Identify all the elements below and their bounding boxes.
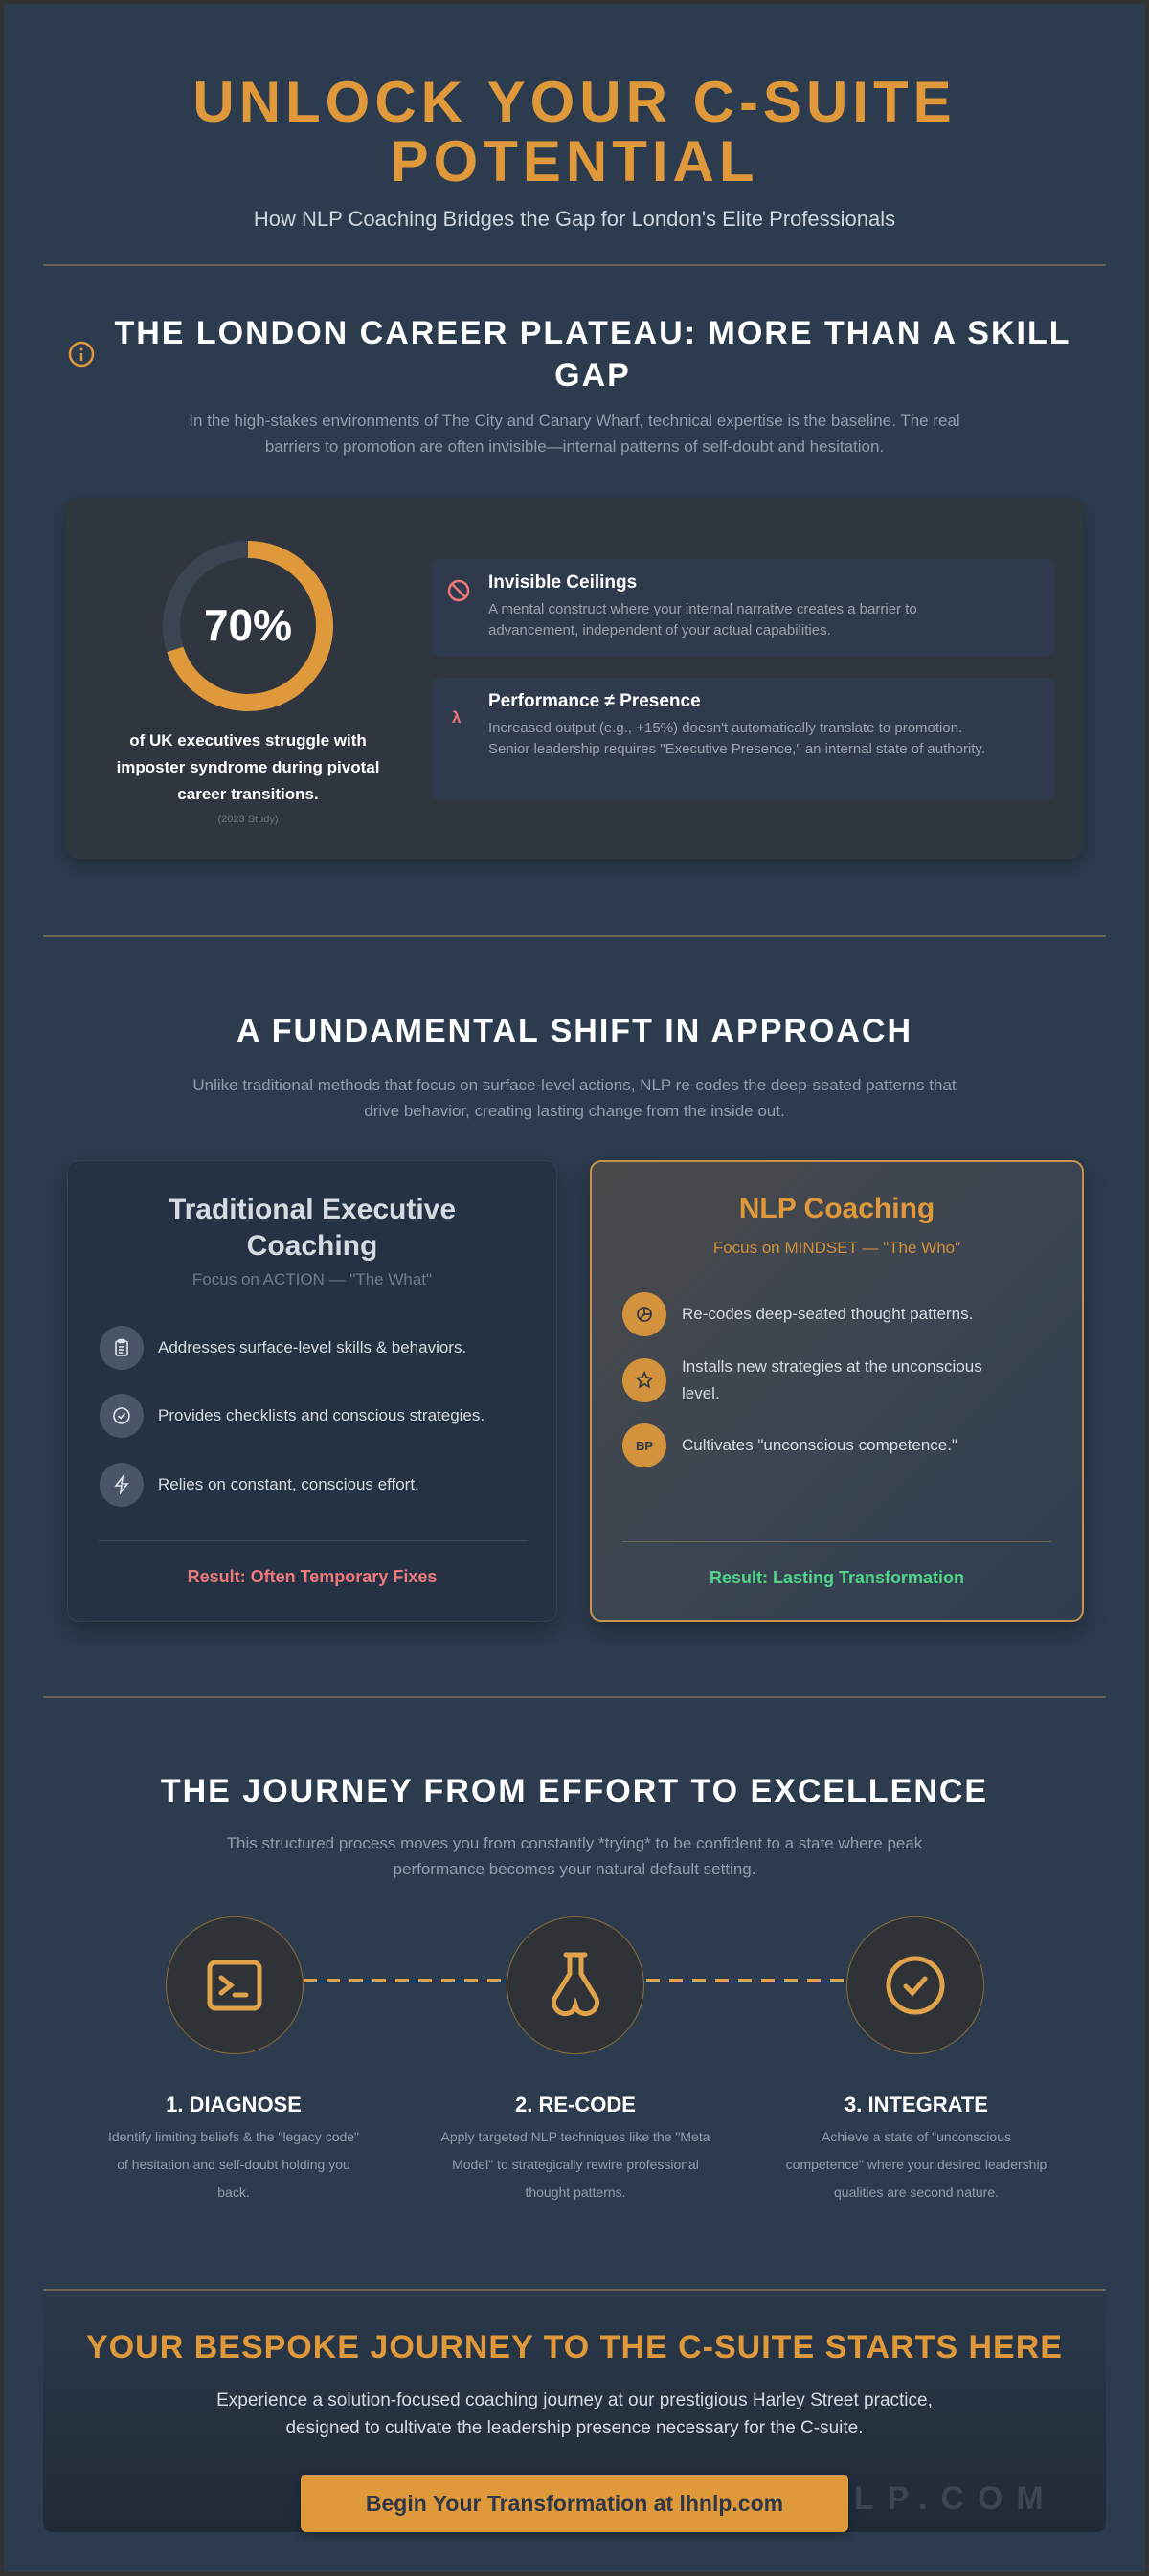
step 3 text: Achieve a state of "unconscious competence" where your desired leadership qualities are second nature. xyxy=(786,2129,1047,2200)
step 2 text: Apply targeted NLP techniques like the "Meta Model" to strategically rewire professional thought patterns. xyxy=(440,2129,710,2200)
panel: traditional coaching: Focus on ACTION — "The What" xyxy=(192,1270,432,1288)
item 3 xyxy=(100,1463,144,1507)
CTA paragraph: designed to cultivate the leadership presence necessary for the C-suite. xyxy=(285,2418,864,2438)
title: UNLOCK YOUR C-SUITE xyxy=(192,70,957,134)
card: invisible ceilings: A mental construct where your internal narrative creates a barrier to advancement, independent of your actual capabilities. xyxy=(488,601,917,638)
heading: London career plateau xyxy=(114,315,1071,393)
card: invisible ceilings: Invisible Ceilings xyxy=(488,572,637,593)
step 2 text: 2. RE-CODE xyxy=(515,2093,636,2117)
step 1 text: 1. DIAGNOSE xyxy=(166,2093,302,2117)
heading: London career plateau: GAP xyxy=(554,357,631,393)
title: POTENTIAL xyxy=(391,129,758,193)
card: performance vs presence: λ xyxy=(452,708,461,727)
CTA heading: YOUR BESPOKE JOURNEY TO THE C-SUITE STARTS HERE xyxy=(86,2329,1063,2365)
panel: NLP coaching xyxy=(590,1160,1084,1622)
panel: traditional coaching: Provides checklists and conscious strategies. xyxy=(158,1406,484,1424)
heading: fundamental shift: A FUNDAMENTAL SHIFT IN APPROACH xyxy=(237,1013,912,1049)
panel: NLP coaching: Installs new strategies at the unconscious level. xyxy=(682,1357,982,1402)
step 1 icon xyxy=(166,1916,304,2054)
item 3 xyxy=(622,1423,666,1467)
donut chart 70% xyxy=(163,541,333,711)
item 2 xyxy=(622,1358,666,1402)
card: performance vs presence: Performance ≠ Presence xyxy=(488,691,701,711)
card: performance vs presence: Increased output (e.g., +15%) doesn't automatically translate to promotion. Senior leadership requires "Executive Presence," an internal state of authority. xyxy=(488,720,985,757)
card: invisible ceilings xyxy=(433,559,1054,657)
panel: NLP coaching: Re-codes deep-seated thought patterns. xyxy=(682,1305,973,1323)
item 1 xyxy=(622,1292,666,1336)
icon: info xyxy=(69,341,94,368)
intro paragraph xyxy=(189,412,960,456)
step 2 icon xyxy=(507,1916,644,2054)
intro paragraph: In the high-stakes environments of The City and Canary Wharf, technical expertise is the baseline. The real xyxy=(189,412,960,430)
step 1 text: Identify limiting beliefs & the "legacy code" of hesitation and self-doubt holding you back. xyxy=(108,2129,359,2200)
watermark: LHNLP.COM xyxy=(747,2480,1057,2517)
heading: journey: THE JOURNEY FROM EFFORT TO EXCELLENCE xyxy=(161,1773,988,1809)
item 1 xyxy=(100,1326,144,1370)
panel: NLP coaching: Focus on MINDSET — "The Who" xyxy=(713,1239,960,1257)
shift paragraph: Unlike traditional methods that focus on surface-level actions, NLP re-codes the deep-seated patterns that xyxy=(192,1076,957,1094)
panel: traditional coaching: Relies on constant, conscious effort. xyxy=(158,1475,419,1493)
panel: traditional coaching: Addresses surface-level skills & behaviors. xyxy=(158,1338,466,1356)
intro paragraph: barriers to promotion are often invisible—internal patterns of self-doubt and hesitation. xyxy=(265,437,884,456)
item 2 xyxy=(100,1394,144,1438)
subtitle: How NLP Coaching Bridges the Gap for London's Elite Professionals xyxy=(254,207,895,231)
title: NLP Coaching xyxy=(739,1193,935,1224)
panel: traditional coaching xyxy=(67,1160,557,1622)
journey paragraph xyxy=(227,1834,923,1878)
step 3 text: 3. INTEGRATE xyxy=(845,2093,988,2117)
CTA paragraph: Experience a solution-focused coaching journey at our prestigious Harley Street practice, xyxy=(216,2390,933,2410)
shift paragraph xyxy=(192,1076,957,1120)
donut chart 70%: 70% xyxy=(204,600,292,650)
step 3 text xyxy=(786,2093,1047,2200)
title: Coaching xyxy=(247,1230,377,1262)
item 3: BP xyxy=(636,1438,653,1453)
button xyxy=(301,2475,848,2532)
journey paragraph: This structured process moves you from constantly *trying* to be confident to a state where peak xyxy=(227,1834,922,1852)
panel: stats xyxy=(66,498,1083,859)
card: performance vs presence xyxy=(433,678,1054,801)
arrow: dashed connectors xyxy=(304,1979,844,1982)
journey paragraph: performance becomes your natural default setting. xyxy=(394,1860,755,1878)
title: Traditional Executive xyxy=(169,1194,456,1225)
result: Result: Lasting Transformation xyxy=(710,1568,964,1587)
title xyxy=(169,1194,456,1262)
button: Begin Your Transformation at lhnlp.com xyxy=(366,2491,783,2516)
stat caption: of UK executives struggle with imposter syndrome during pivotal career transitions. xyxy=(117,731,379,803)
result: Result: Often Temporary Fixes xyxy=(188,1567,437,1586)
CTA paragraph xyxy=(216,2390,933,2438)
panel: call to action xyxy=(43,2291,1106,2532)
title xyxy=(192,70,957,193)
heading: London career plateau: THE LONDON CAREER PLATEAU: MORE THAN A SKILL xyxy=(114,315,1071,351)
source: (2023 Study) xyxy=(218,814,278,825)
step 1 text xyxy=(108,2093,359,2200)
panel: NLP coaching: Cultivates "unconscious competence." xyxy=(682,1436,958,1454)
step 2 text xyxy=(440,2093,710,2200)
shift paragraph: drive behavior, creating lasting change from the inside out. xyxy=(364,1102,785,1120)
step 3 icon xyxy=(846,1916,984,2054)
